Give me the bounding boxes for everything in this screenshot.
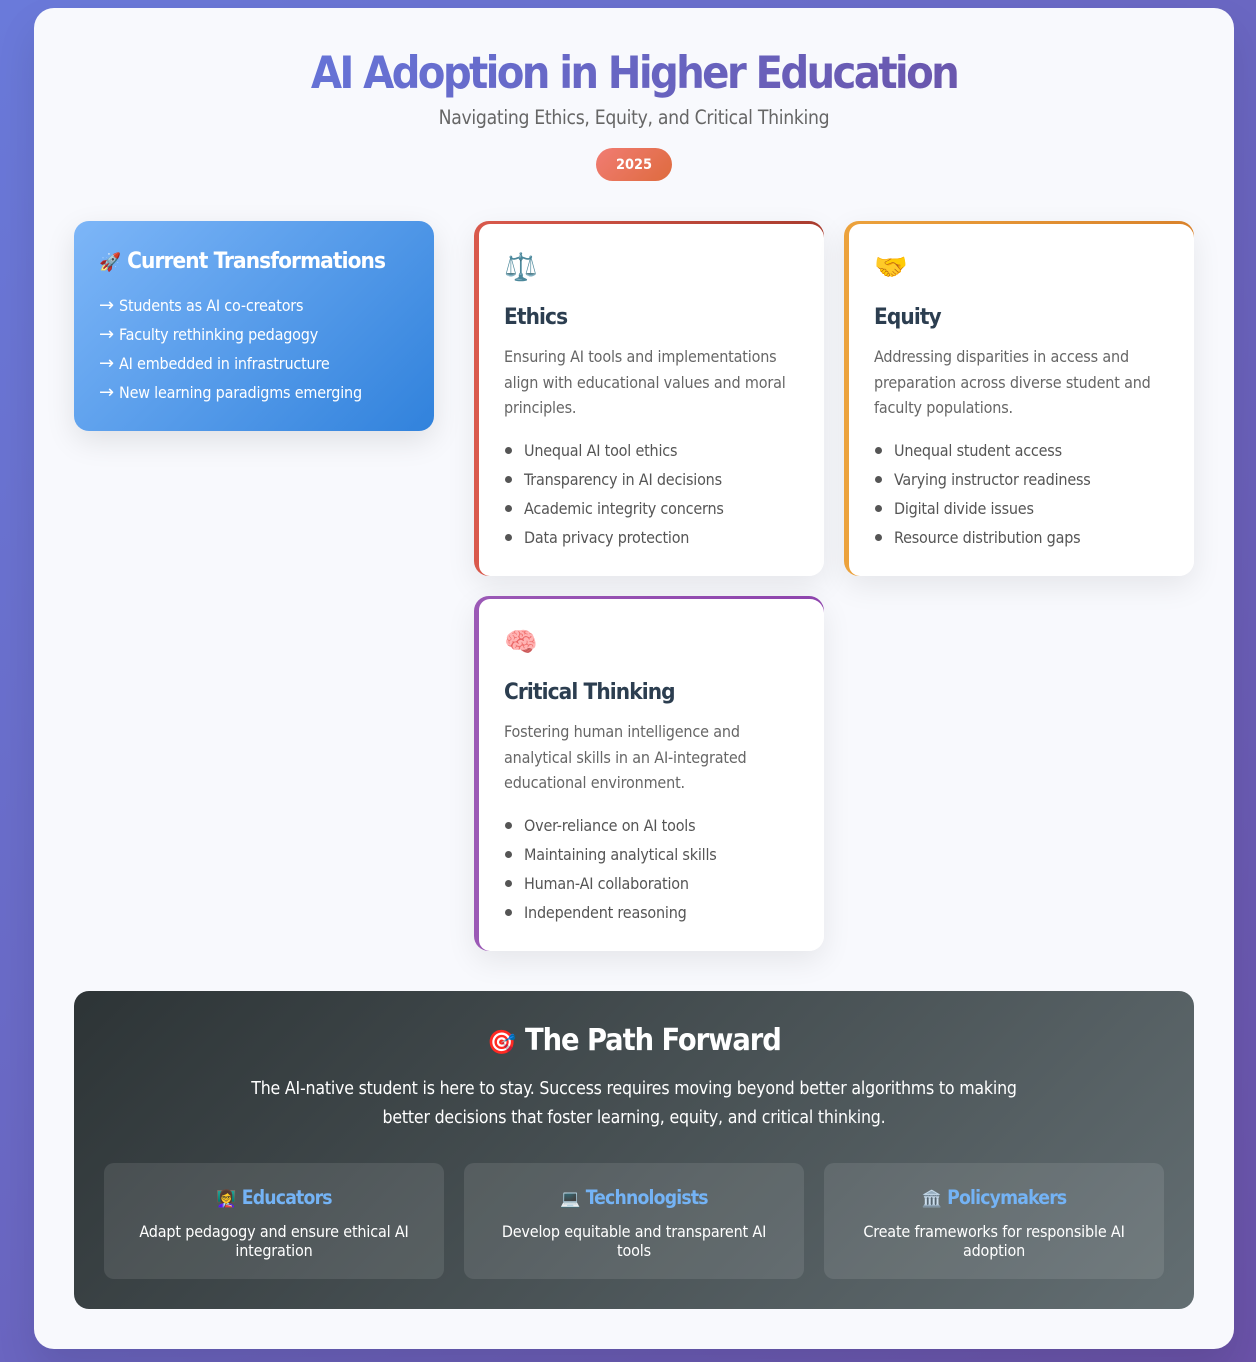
year badge: 2025 <box>616 157 652 173</box>
list: transformations: Students as AI co-creators <box>119 296 303 315</box>
list: critical thinking issues: Independent reasoning <box>524 903 687 922</box>
list: transformations: → <box>99 295 114 316</box>
heading: equity: Equity <box>874 304 941 330</box>
list: ethics issues: Transparency in AI decisions <box>524 470 722 489</box>
list: equity issues: Varying instructor readiness <box>894 470 1091 489</box>
list: critical thinking issues: Human-AI collaboration <box>524 874 689 893</box>
subtitle: Navigating Ethics, Equity, and Critical Thinking <box>439 106 829 129</box>
panel: equity <box>844 221 1194 576</box>
list: equity issues <box>875 441 1091 547</box>
list: equity issues: Digital divide issues <box>894 499 1034 518</box>
list: ethics issues: Academic integrity concerns <box>524 499 724 518</box>
text: ethics description: Ensuring AI tools and implementations align with educational values and moral principles. <box>504 347 786 417</box>
card: technologists <box>464 1163 804 1279</box>
year badge <box>596 148 672 181</box>
panel: ethics <box>474 221 824 576</box>
icon: handshake: 🤝 <box>874 252 908 283</box>
list: equity issues: Unequal student access <box>894 441 1062 460</box>
card: educators <box>104 1163 444 1279</box>
icon: scales: ⚖️ <box>504 252 538 283</box>
heading: critical thinking: Critical Thinking <box>504 679 675 705</box>
list: ethics issues: Data privacy protection <box>524 528 689 547</box>
title: AI Adoption in Higher Education <box>311 46 957 99</box>
list: ethics issues <box>505 441 724 547</box>
list: transformations: → <box>99 324 114 345</box>
text: equity description: Addressing disparities in access and preparation across diverse student and faculty populations. <box>874 347 1151 417</box>
list: critical thinking issues: Maintaining analytical skills <box>524 845 717 864</box>
panel: critical thinking <box>474 596 824 951</box>
heading: ethics: Ethics <box>504 304 567 330</box>
list: transformations: → <box>99 382 114 403</box>
list: transformations: → <box>99 353 114 374</box>
card: policymakers <box>824 1163 1164 1279</box>
heading: current transformations: 🚀 Current Transformations <box>99 248 385 274</box>
card: educators: 👩‍🏫 Educators <box>216 1186 332 1209</box>
list: critical thinking issues: Over-reliance on AI tools <box>524 816 695 835</box>
header <box>311 46 957 181</box>
list: transformations: AI embedded in infrastructure <box>119 354 330 373</box>
icon: brain: 🧠 <box>504 627 538 658</box>
list: equity issues: Resource distribution gaps <box>894 528 1080 547</box>
heading: the path forward: 🎯 The Path Forward <box>487 1023 781 1058</box>
list: transformations: New learning paradigms emerging <box>119 383 362 402</box>
list: ethics issues: Unequal AI tool ethics <box>524 441 677 460</box>
card: technologists: Develop equitable and transparent AI tools <box>502 1222 766 1260</box>
card: educators: Adapt pedagogy and ensure ethical AI integration <box>139 1222 409 1260</box>
text: critical thinking description: Fostering human intelligence and analytical skills in an AI-integrated educational environment. <box>504 722 746 792</box>
card: policymakers: 🏛️ Policymakers <box>922 1186 1066 1209</box>
text: path forward summary: The AI-native student is here to stay. Success requires moving beyond better algorithms to making better decisions that foster learning, equity, and critical thinking. <box>251 1079 1017 1128</box>
panel: the path forward <box>74 991 1194 1309</box>
list: transformations <box>99 295 362 403</box>
list: transformations: Faculty rethinking pedagogy <box>119 325 318 344</box>
list: critical thinking issues <box>505 816 717 922</box>
panel: current transformations <box>74 221 434 431</box>
card: technologists: 💻 Technologists <box>560 1186 708 1209</box>
card: policymakers: Create frameworks for responsible AI adoption <box>863 1222 1125 1260</box>
